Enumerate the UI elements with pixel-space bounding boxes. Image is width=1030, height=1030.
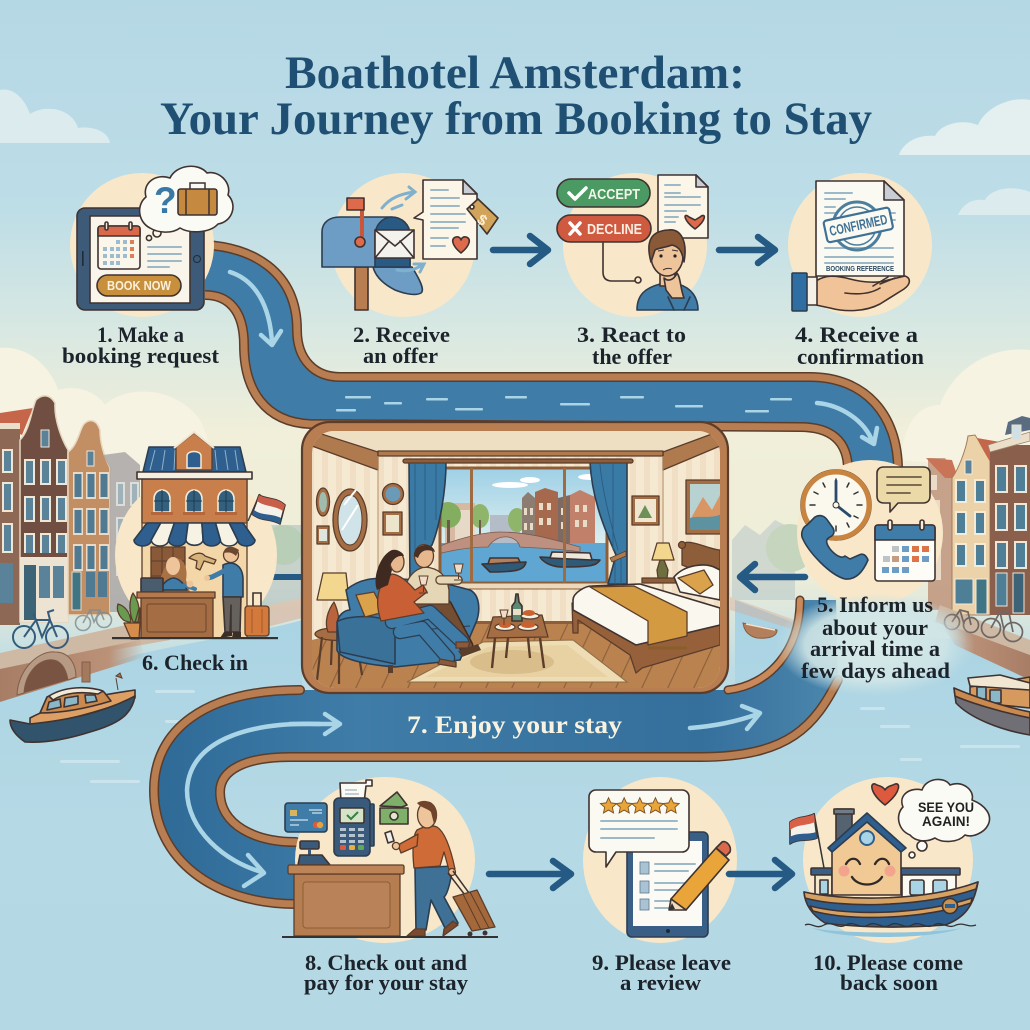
title: Your Journey from Booking to Stay xyxy=(160,93,872,145)
label: 6. Check in xyxy=(142,650,248,675)
arrow 8 to 9 xyxy=(489,861,571,888)
distant city left of room xyxy=(255,525,304,630)
step 1 to 5 river xyxy=(205,245,898,470)
house B xyxy=(20,396,68,622)
icon: cash register xyxy=(298,841,330,865)
label: back soon xyxy=(840,970,938,995)
circle xyxy=(115,474,277,636)
clouds xyxy=(0,90,1030,500)
arrow 3 to 4 xyxy=(719,237,775,263)
distant city right of room xyxy=(730,520,814,630)
icon: banknotes xyxy=(380,792,408,824)
icon: thought cloud see you again xyxy=(899,779,990,858)
label: booking request xyxy=(62,343,220,368)
icon: thought cloud see you again: AGAIN! xyxy=(922,813,970,829)
window view xyxy=(430,468,607,583)
arrow stub left of room xyxy=(272,574,304,580)
decline button: DECLINE xyxy=(587,222,642,238)
label: about your xyxy=(822,615,928,640)
label: 5. Inform us xyxy=(817,592,933,617)
label: pay for your stay xyxy=(304,970,468,995)
label: few days ahead xyxy=(801,658,950,683)
right canal houses xyxy=(926,416,1030,615)
icon: review bubble xyxy=(589,790,689,867)
step 8: check out and pay xyxy=(282,777,498,995)
label: 8. Check out and xyxy=(305,950,467,975)
right quay xyxy=(935,605,1030,680)
wall pictures xyxy=(333,489,367,551)
accept button xyxy=(557,179,650,207)
river banks xyxy=(154,600,838,904)
step 7 river xyxy=(154,600,838,904)
step 5: inform us about arrival time xyxy=(775,460,975,697)
label: arrival time a xyxy=(810,636,940,661)
label: 3. React to xyxy=(577,322,686,347)
canal water xyxy=(0,600,1030,1030)
step 7 label: 7. Enjoy your stay xyxy=(407,712,623,739)
canal boats xyxy=(482,562,526,572)
icon: thought cloud: ? xyxy=(154,180,177,221)
title: Boathotel Amsterdam: xyxy=(285,47,745,99)
step 6: check in xyxy=(112,432,285,675)
rug xyxy=(407,640,627,682)
label xyxy=(592,950,731,995)
icon: confirmed document: CONFIRMED xyxy=(828,211,889,239)
label xyxy=(801,592,950,683)
label: an offer xyxy=(363,343,438,368)
arrow 5 to 6 xyxy=(740,564,805,590)
circle xyxy=(331,173,475,317)
icon: mailbox xyxy=(322,198,422,310)
icon: reception desk xyxy=(137,592,215,638)
house faded xyxy=(926,458,958,610)
arrow 2 to 3 xyxy=(493,236,548,264)
circle xyxy=(583,777,737,943)
coffee table with food xyxy=(487,594,548,668)
icon: suitcase xyxy=(448,871,495,936)
icon: clock xyxy=(801,470,871,540)
house cream xyxy=(952,435,1000,615)
label xyxy=(795,322,924,369)
step 9: leave a review xyxy=(583,777,737,995)
icon: suitcase xyxy=(245,593,269,636)
icon: dutch flag xyxy=(248,494,285,524)
circle xyxy=(797,460,943,606)
right houseboat xyxy=(954,675,1030,735)
water ripples xyxy=(60,690,1020,783)
label xyxy=(304,950,468,995)
river banks xyxy=(205,245,898,470)
book now button: BOOK NOW xyxy=(107,279,171,293)
step 10: come back soon xyxy=(790,777,990,995)
icon: tablet xyxy=(77,208,204,310)
icon: thought cloud see you again: SEE YOU xyxy=(918,799,974,815)
icon: offer document xyxy=(414,180,498,259)
icon: hand xyxy=(792,273,909,311)
label xyxy=(62,322,220,368)
sofa xyxy=(337,578,479,667)
arched windows xyxy=(154,490,234,512)
icon: confirmed document: BOOKING REFERENCE xyxy=(826,264,894,273)
label: 9. Please leave xyxy=(592,950,731,975)
circle xyxy=(563,173,707,317)
icon: thought cloud xyxy=(140,166,233,232)
circle xyxy=(70,173,214,317)
icon: hotel building xyxy=(134,432,255,638)
side table and lamp xyxy=(314,628,336,641)
left tour boat xyxy=(10,673,135,742)
label: 10. Please come xyxy=(813,950,963,975)
label xyxy=(353,322,450,368)
floor xyxy=(312,623,720,688)
man on sofa xyxy=(404,544,481,657)
icon: payment terminal xyxy=(334,798,374,856)
house brown xyxy=(988,416,1030,615)
flow arrows xyxy=(230,272,877,444)
label: 4. Receive a xyxy=(795,322,918,347)
bed xyxy=(572,542,720,673)
receptionist xyxy=(141,557,195,592)
river fill xyxy=(205,245,898,470)
icon: plant xyxy=(118,593,140,639)
left bicycles xyxy=(13,610,112,648)
water highlights xyxy=(336,396,792,412)
panel: boat room xyxy=(302,422,728,693)
flow arrows xyxy=(187,706,760,886)
house A xyxy=(0,408,33,625)
shelves xyxy=(151,547,185,592)
icon: heart xyxy=(872,784,899,805)
right bicycles xyxy=(944,610,1022,642)
woman on sofa xyxy=(375,550,470,667)
curtains xyxy=(409,462,446,584)
left quay with bridge xyxy=(0,618,170,702)
icon: offer document: $ xyxy=(474,211,491,230)
label: the offer xyxy=(592,344,672,369)
label xyxy=(577,322,686,369)
step 1: make a booking request xyxy=(62,166,233,368)
icon: happy houseboat xyxy=(790,809,978,937)
circle xyxy=(788,173,932,317)
label: a review xyxy=(620,970,701,995)
icon: speech bubble xyxy=(877,467,930,512)
awning xyxy=(134,523,255,546)
icon: tablet xyxy=(627,832,708,937)
window frame xyxy=(440,468,607,583)
icon: pencil xyxy=(669,842,730,910)
guest with suitcase xyxy=(385,801,458,936)
fade behind label xyxy=(775,593,975,697)
icon: confirmed document xyxy=(816,181,904,276)
small rowing boat xyxy=(743,623,777,638)
circle xyxy=(803,777,973,943)
step 2: receive an offer xyxy=(322,173,498,368)
icon: receipt xyxy=(340,780,372,803)
step 4: receive a confirmation xyxy=(788,173,932,369)
house D xyxy=(103,452,140,612)
title xyxy=(160,47,872,145)
circle xyxy=(295,777,475,943)
label: 1. Make a xyxy=(97,322,184,347)
step 3: react to the offer xyxy=(557,173,708,369)
icon: calendar xyxy=(875,520,935,581)
room frame xyxy=(302,422,728,693)
label: confirmation xyxy=(797,344,924,369)
icon: counter xyxy=(288,865,404,936)
icon: calendar xyxy=(98,222,140,269)
guest xyxy=(204,547,243,638)
icon: keys xyxy=(189,553,216,570)
icon: document with heart xyxy=(658,175,708,238)
icon: credit card xyxy=(285,803,327,832)
arrow 9 to 10 xyxy=(729,860,792,888)
accept button: ACCEPT xyxy=(588,187,640,203)
room interior xyxy=(312,431,726,688)
icon: phone xyxy=(802,516,868,579)
left canal houses xyxy=(0,396,140,625)
house C xyxy=(68,421,110,615)
decline button xyxy=(557,215,651,242)
label xyxy=(813,950,963,995)
label: 2. Receive xyxy=(353,322,450,347)
river fill xyxy=(154,600,838,904)
person thinking xyxy=(637,230,698,310)
